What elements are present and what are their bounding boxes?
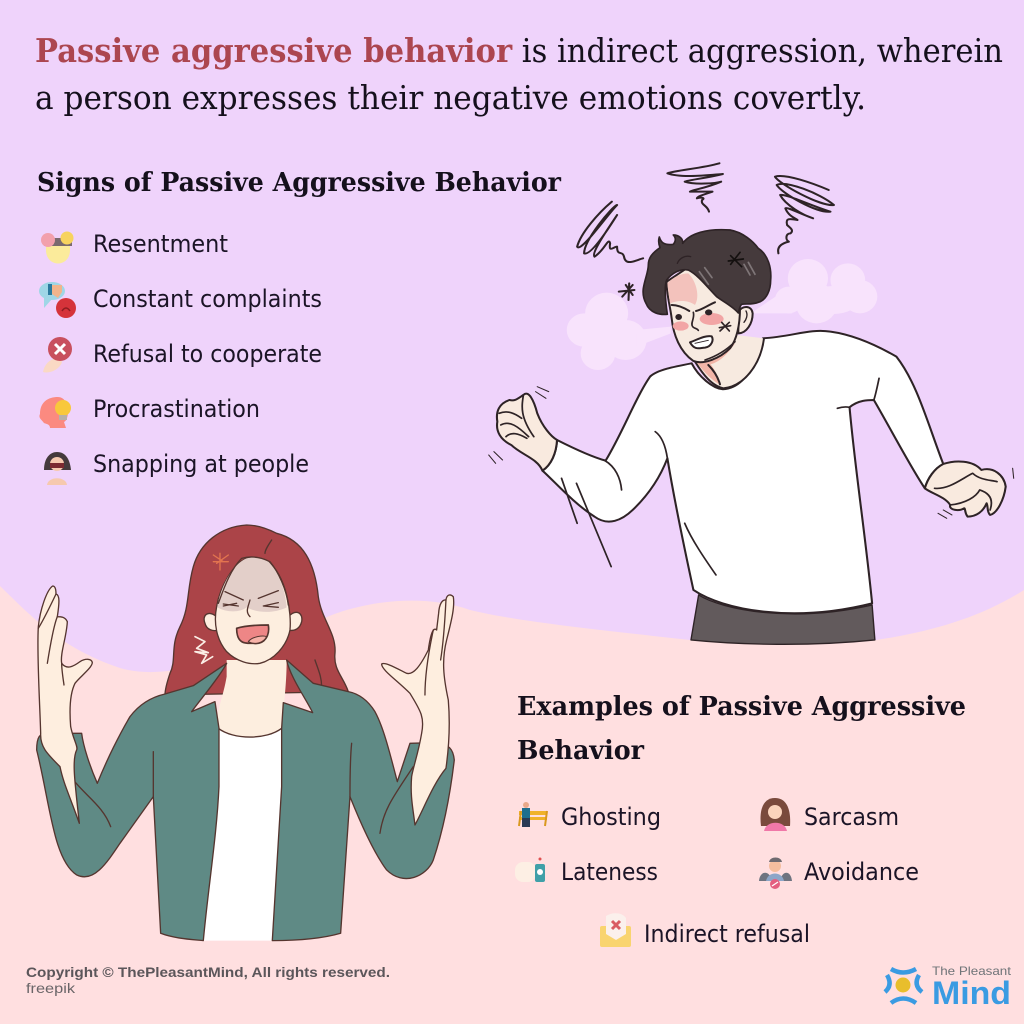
brows bbox=[672, 302, 715, 311]
list: signs: Refusal to cooperate bbox=[93, 340, 322, 368]
logo mark bbox=[885, 969, 922, 1003]
list: signs: Procrastination bbox=[93, 395, 260, 423]
icon: lateness bbox=[515, 858, 545, 882]
brows and eyes bbox=[223, 591, 278, 617]
jacket right bbox=[272, 660, 454, 941]
icon: snapping bbox=[44, 452, 71, 485]
illustration: shouting woman bbox=[37, 525, 454, 941]
face bbox=[667, 268, 740, 362]
illustration: angry man body bbox=[489, 163, 1014, 644]
list: examples: Indirect refusal bbox=[644, 920, 810, 948]
face bbox=[215, 557, 290, 664]
icon: procrastination bbox=[39, 397, 71, 428]
sweater bbox=[542, 331, 943, 613]
left fist bbox=[497, 394, 557, 471]
left fingers bbox=[38, 594, 64, 685]
list: examples: Avoidance bbox=[804, 858, 919, 886]
copyright: Copyright © ThePleasantMind, All rights reserved. bbox=[26, 964, 390, 980]
jaw line bbox=[705, 342, 735, 360]
icon: resentment bbox=[41, 232, 74, 264]
jacket seam lines bbox=[73, 743, 413, 833]
logo small text: The Pleasant bbox=[932, 964, 1012, 978]
left fist fingers bbox=[499, 395, 534, 438]
hair part line bbox=[677, 256, 691, 263]
sweater folds bbox=[562, 378, 879, 575]
neck shadow bbox=[695, 343, 735, 384]
icon: sarcasm bbox=[761, 798, 790, 831]
hair strands bbox=[265, 540, 322, 687]
stress squiggle bbox=[195, 637, 213, 663]
nose bbox=[692, 312, 698, 330]
face shadow bbox=[217, 557, 287, 612]
title line 2: a person expresses their negative emotions covertly. bbox=[35, 78, 866, 117]
icon: indirect refusal bbox=[600, 913, 631, 947]
shirt bbox=[203, 728, 282, 941]
jacket bbox=[37, 663, 227, 941]
anger mark bbox=[213, 553, 228, 570]
mouth bbox=[237, 625, 269, 644]
right hand bbox=[925, 461, 1006, 517]
list: signs bbox=[93, 230, 322, 478]
illustration: angry man head bbox=[643, 230, 771, 388]
hair anger mark bbox=[728, 252, 743, 267]
list: examples bbox=[561, 803, 919, 948]
right fingers bbox=[425, 600, 446, 695]
logo bbox=[885, 964, 1012, 1011]
hair highlights bbox=[699, 262, 755, 284]
right arm and hand bbox=[382, 595, 454, 825]
left arm and hand bbox=[38, 586, 92, 823]
icon: avoidance bbox=[759, 858, 792, 889]
scribbles bbox=[577, 163, 834, 300]
eyes bbox=[675, 309, 712, 320]
neckline and crease bbox=[695, 338, 764, 388]
credit: freepik bbox=[26, 980, 76, 996]
right hand fingers bbox=[935, 473, 997, 510]
title: Passive aggressive behavior is indirect aggression, wherein bbox=[35, 31, 1003, 70]
cheek flush bbox=[673, 313, 724, 331]
list: signs: Constant complaints bbox=[93, 285, 322, 313]
neck bbox=[695, 335, 764, 388]
list: examples: Sarcasm bbox=[804, 803, 899, 831]
fringe outline bbox=[218, 557, 288, 605]
logo big text: Mind bbox=[932, 975, 1011, 1011]
ears bbox=[204, 612, 302, 631]
icon: ghosting bbox=[519, 802, 547, 827]
steam clouds bbox=[567, 259, 877, 370]
heading: examples: Examples of Passive Aggressive bbox=[517, 692, 966, 722]
logo sun bbox=[896, 978, 910, 992]
ear bbox=[738, 307, 753, 333]
heading: examples line 2: Behavior bbox=[517, 736, 644, 766]
pants bbox=[691, 595, 875, 644]
teeth bbox=[690, 336, 713, 348]
ear detail bbox=[744, 311, 747, 322]
hair bbox=[165, 525, 348, 695]
tongue bbox=[248, 636, 267, 643]
list: signs: Snapping at people bbox=[93, 450, 309, 478]
list: examples: Ghosting bbox=[561, 803, 661, 831]
neck bbox=[217, 660, 287, 737]
shake marks bbox=[489, 387, 1014, 518]
icon: refusal bbox=[43, 337, 72, 372]
hair bbox=[643, 230, 771, 314]
cheek anger mark bbox=[719, 322, 731, 331]
list: examples: Lateness bbox=[561, 858, 658, 886]
heading: signs: Signs of Passive Aggressive Behavior bbox=[37, 168, 561, 198]
pink wave panel bbox=[0, 586, 1024, 1024]
teeth line bbox=[695, 340, 708, 343]
icon: complaints bbox=[39, 282, 76, 318]
neckline bbox=[218, 728, 282, 737]
forehead flush bbox=[667, 273, 697, 305]
list: signs: Resentment bbox=[93, 230, 228, 258]
